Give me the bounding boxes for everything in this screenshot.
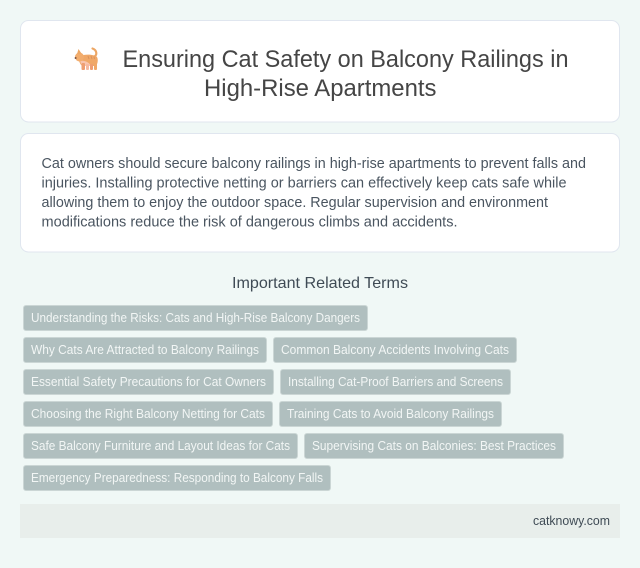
- tag: Understanding the Risks: Cats and High-Rise Balcony Dangers: [31, 311, 360, 325]
- title text line 1: Ensuring Cat Safety on Balcony Railings in: [122, 46, 568, 73]
- tag: Emergency Preparedness: Responding to Balcony Falls: [31, 471, 323, 485]
- tag: Supervising Cats on Balconies: Best Practices: [312, 439, 556, 453]
- tag: [274, 338, 516, 362]
- footer site name: catknowy.com: [533, 514, 610, 528]
- tag: [24, 402, 272, 426]
- summary line 2: injuries. Installing protective netting or barriers can effectively keep cats safe while: [42, 174, 566, 192]
- tag: Essential Safety Precautions for Cat Owners: [31, 375, 266, 389]
- tag: [280, 402, 502, 426]
- tag: [24, 306, 368, 330]
- summary line 1: Cat owners should secure balcony railings in high-rise apartments to prevent falls and: [42, 155, 586, 172]
- tag: [24, 338, 266, 362]
- tag: Choosing the Right Balcony Netting for Cats: [31, 407, 265, 421]
- tag: [24, 466, 330, 490]
- icon: cat: [75, 48, 98, 70]
- panel: title: [20, 20, 620, 122]
- summary line 3: allowing them to enjoy the outdoor space. Regular supervision and environment: [42, 194, 549, 211]
- title text line 2: High-Rise Apartments: [204, 75, 436, 102]
- tag: Safe Balcony Furniture and Layout Ideas for Cats: [31, 439, 290, 453]
- tag: [280, 370, 510, 394]
- panel: summary: [20, 134, 620, 252]
- heading: related terms: Important Related Terms: [232, 275, 408, 292]
- tag: Training Cats to Avoid Balcony Railings: [287, 407, 494, 421]
- tag: [24, 434, 298, 458]
- tag: Installing Cat-Proof Barriers and Screens: [288, 375, 503, 389]
- footer: [20, 504, 620, 538]
- tag: [24, 370, 274, 394]
- tag: Why Cats Are Attracted to Balcony Railings: [31, 343, 259, 357]
- tag: Common Balcony Accidents Involving Cats: [281, 343, 509, 357]
- summary line 4: modifications reduce the risk of dangerous climbs and accidents.: [42, 214, 458, 230]
- tag: [304, 434, 564, 458]
- tag list: [24, 306, 564, 490]
